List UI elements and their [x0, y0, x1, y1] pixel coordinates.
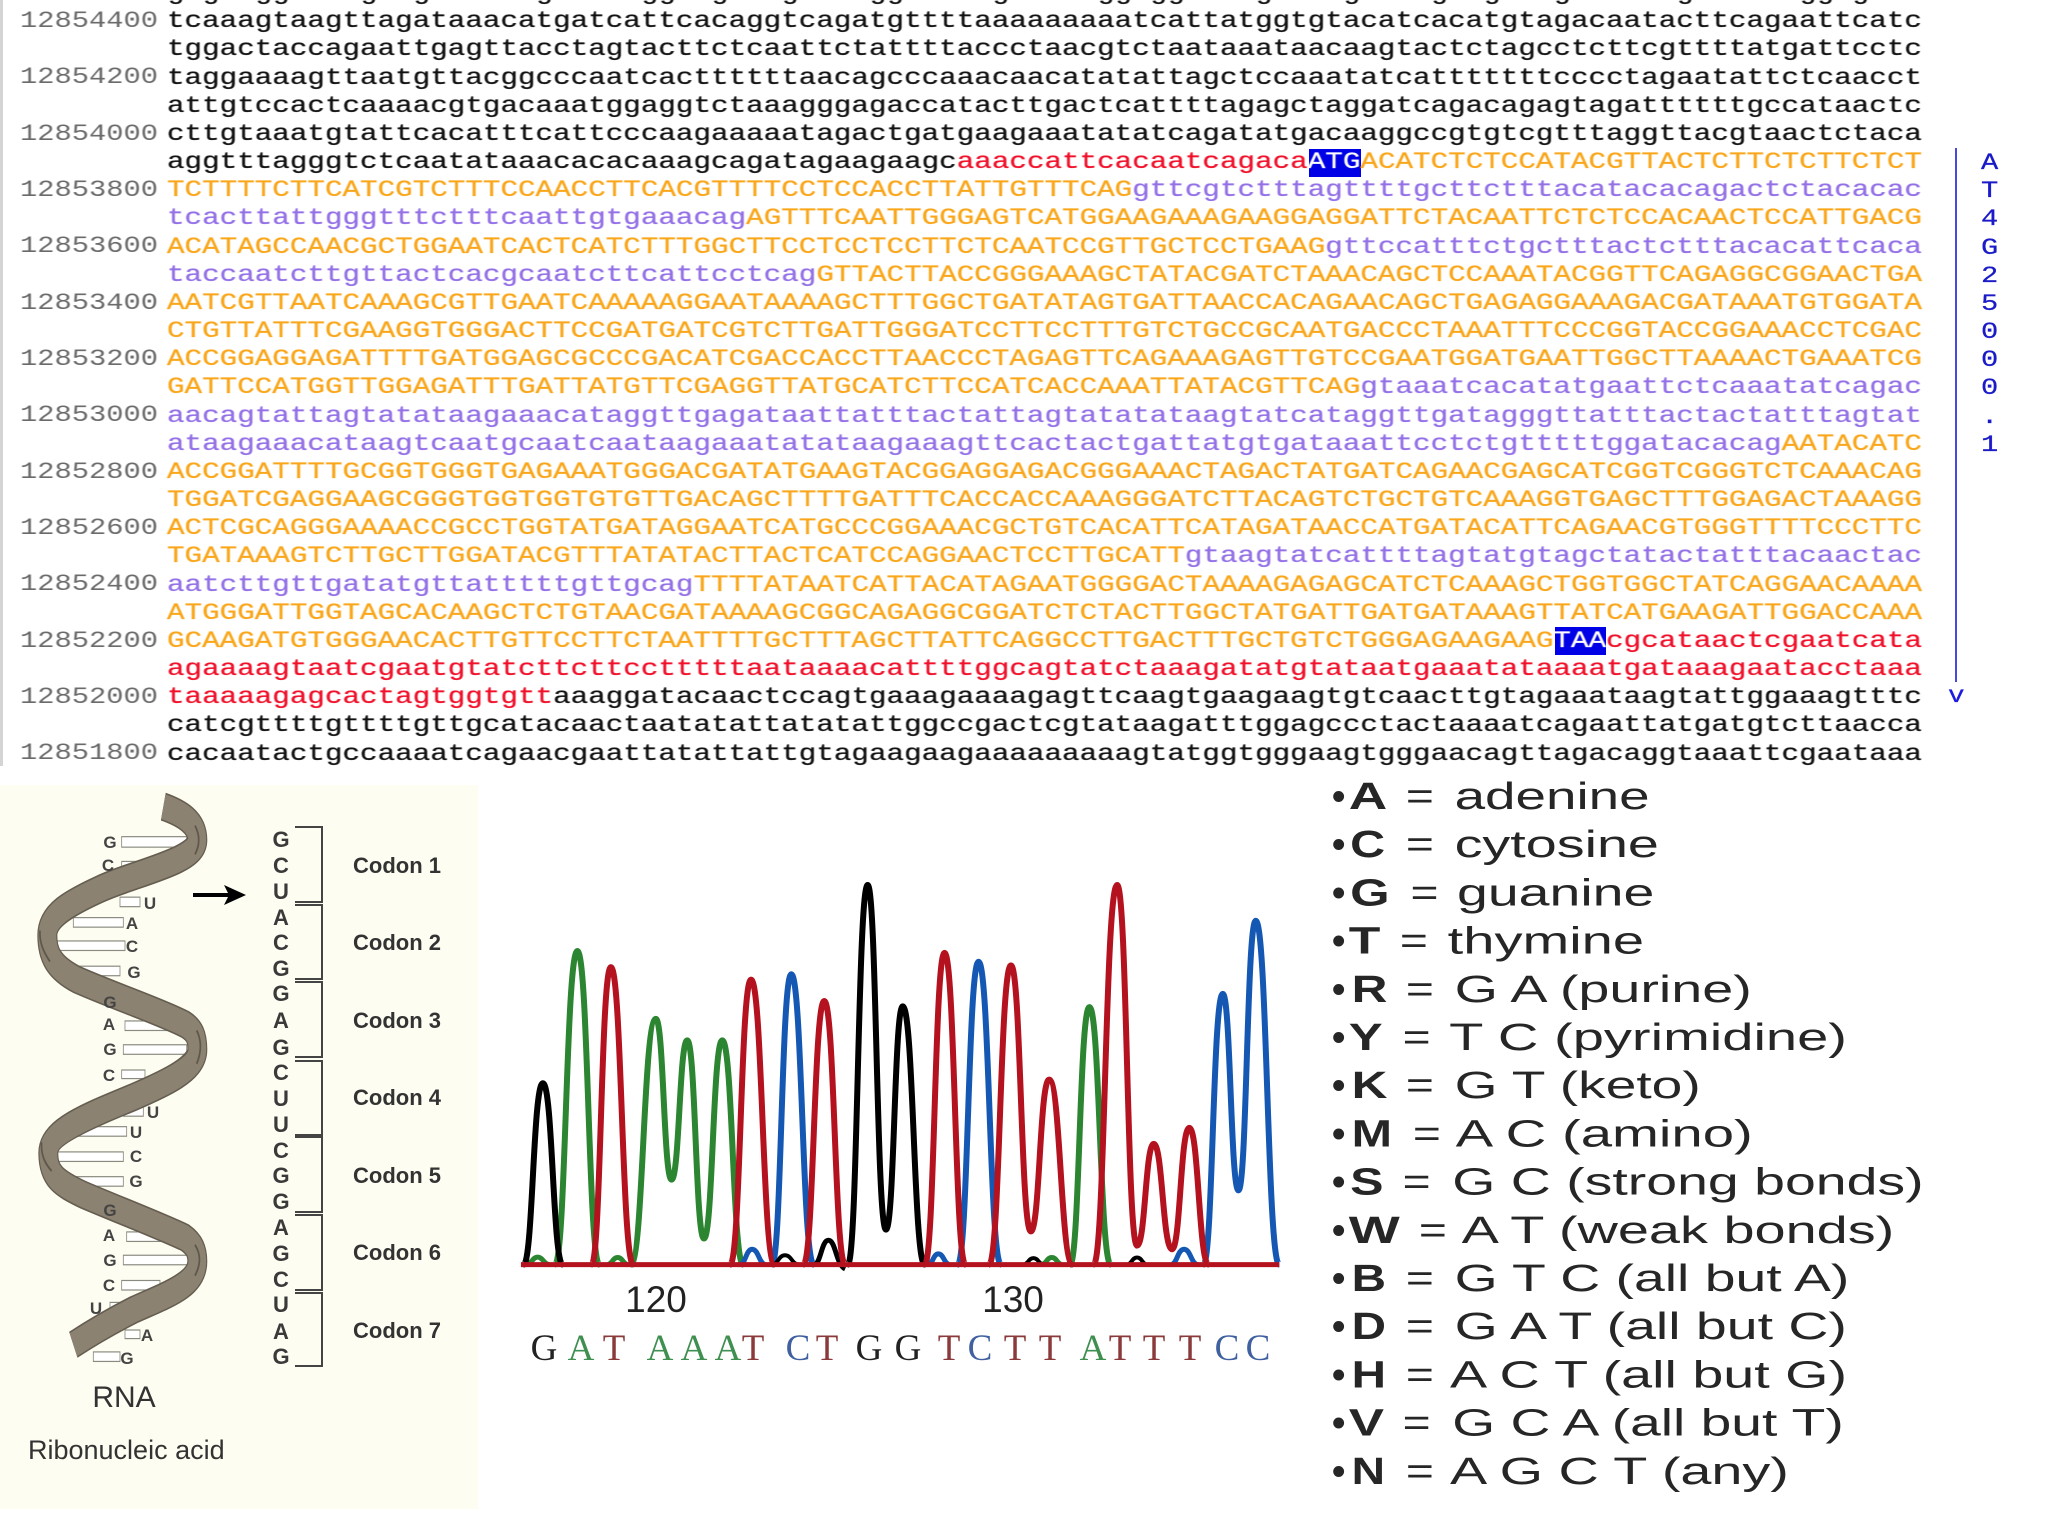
base calls: C [786, 1328, 810, 1369]
base calls: G [895, 1328, 921, 1369]
legend: nucleotide codes [1332, 779, 1924, 1493]
base calls: C [1246, 1328, 1270, 1369]
helix base letters: C [126, 937, 138, 956]
helix base letters: U [130, 1123, 142, 1142]
base calls: A [647, 1328, 674, 1369]
legend: nucleotide codes: C [1350, 824, 1385, 866]
legend: nucleotide codes: B [1352, 1258, 1386, 1300]
helix base letters: G [103, 1201, 117, 1220]
codon base column: G [272, 1189, 290, 1214]
helix base letters: U [90, 1299, 102, 1318]
codon base column: G [272, 956, 290, 981]
codon labels: Codon 7 [353, 1318, 441, 1343]
legend: nucleotide codes: • [1332, 1258, 1345, 1300]
codon base column [272, 827, 290, 1369]
legend: nucleotide codes: • [1332, 969, 1345, 1011]
chromatogram [520, 882, 1281, 1369]
helix base letters: A [103, 1015, 115, 1034]
legend: nucleotide codes: G T C (all but A) [1455, 1258, 1849, 1300]
legend: nucleotide codes: = [1406, 1065, 1434, 1107]
position labels: 130 [982, 1279, 1044, 1320]
base calls: T [1004, 1328, 1026, 1369]
codon base column: C [273, 853, 289, 878]
helix base letters: G [127, 963, 141, 982]
legend: nucleotide codes: = [1400, 921, 1428, 963]
codon labels [353, 853, 442, 1343]
codon base column: U [273, 1112, 289, 1137]
helix base letters: A [141, 1326, 153, 1345]
legend: nucleotide codes: W [1349, 1210, 1400, 1252]
codon base column: G [272, 1163, 290, 1188]
helix base letters: C [103, 1276, 115, 1295]
base calls: T [603, 1328, 625, 1369]
base calls: C [968, 1328, 992, 1369]
helix base letters: G [103, 1040, 117, 1059]
left gray page edge [0, 0, 3, 766]
base calls: A [715, 1328, 742, 1369]
legend: nucleotide codes: V [1349, 1403, 1385, 1445]
legend: nucleotide codes: • [1332, 1403, 1345, 1445]
legend: nucleotide codes: = [1406, 1306, 1434, 1348]
legend: nucleotide codes: T C (pyrimidine) [1449, 1017, 1847, 1059]
legend: nucleotide codes: = [1406, 1451, 1434, 1493]
coordinate numbers: 12854400 12854200 12854000 12853800 12853600 12853400 12853200 12853000 12852800 12852600 12852400 12852200 12852000 12851800 [20, 8, 158, 766]
base calls: A [681, 1328, 708, 1369]
legend: nucleotide codes: = [1406, 824, 1434, 866]
codon base column: U [273, 879, 289, 904]
legend: nucleotide codes: D [1352, 1306, 1386, 1348]
codon base column: G [272, 1344, 290, 1369]
codon base column: A [273, 905, 289, 930]
codon base column: A [273, 1319, 289, 1344]
codon base column: C [273, 1060, 289, 1085]
codon base column: A [273, 1215, 289, 1240]
legend: nucleotide codes: K [1352, 1065, 1388, 1107]
legend: nucleotide codes: = [1403, 1403, 1431, 1445]
legend: nucleotide codes: = [1413, 1113, 1441, 1155]
base calls: T [1109, 1328, 1131, 1369]
codon base column: U [273, 1292, 289, 1317]
legend: nucleotide codes: = [1406, 1258, 1434, 1300]
helix base letters: G [120, 1349, 134, 1368]
base calls: T [938, 1328, 960, 1369]
helix ribbon with base rungs [40, 807, 200, 1361]
legend: nucleotide codes: Y [1349, 1017, 1383, 1059]
base calls: A [1080, 1328, 1107, 1369]
codon base column: G [272, 1035, 290, 1060]
codon labels: Codon 4 [353, 1085, 442, 1110]
codon base column: U [273, 1086, 289, 1111]
helix base letters [90, 833, 159, 1368]
legend: nucleotide codes: • [1332, 824, 1345, 866]
base calls: T [816, 1328, 838, 1369]
legend: nucleotide codes: A G C T (any) [1450, 1451, 1789, 1493]
legend: nucleotide codes: G T (keto) [1455, 1065, 1701, 1107]
legend: nucleotide codes: • [1332, 1065, 1345, 1107]
helix base letters: U [147, 1103, 159, 1122]
legend: nucleotide codes: = [1419, 1210, 1447, 1252]
legend: nucleotide codes: G A T (all but C) [1455, 1306, 1847, 1348]
codon base column: G [272, 1241, 290, 1266]
helix base letters: G [103, 833, 117, 852]
legend: nucleotide codes: • [1332, 1162, 1345, 1204]
legend: nucleotide codes: thymine [1448, 921, 1644, 963]
base calls [531, 1328, 1270, 1369]
legend: nucleotide codes: • [1332, 1306, 1345, 1348]
position labels [625, 1279, 1044, 1320]
helix base letters: C [103, 1066, 115, 1085]
gene direction line [1955, 148, 1957, 682]
legend: nucleotide codes: • [1332, 1354, 1345, 1396]
legend: nucleotide codes: A C (amino) [1456, 1113, 1753, 1155]
legend: nucleotide codes: • [1332, 1113, 1345, 1155]
codon labels: Codon 2 [353, 930, 441, 955]
base calls: T [742, 1328, 764, 1369]
RNA title: RNA [92, 1381, 156, 1414]
base calls: T [1179, 1328, 1201, 1369]
codon base column: G [272, 827, 290, 852]
legend: nucleotide codes: G C (strong bonds) [1452, 1162, 1924, 1204]
codon brackets [295, 827, 322, 1366]
helix base letters: A [103, 1226, 115, 1245]
legend: nucleotide codes: N [1352, 1451, 1385, 1493]
legend: nucleotide codes: • [1332, 1451, 1345, 1493]
codon labels: Codon 5 [353, 1163, 441, 1188]
legend: nucleotide codes: = [1406, 969, 1434, 1011]
legend: nucleotide codes: A T (weak bonds) [1462, 1210, 1894, 1252]
base calls: A [568, 1328, 595, 1369]
stop codon highlight TAA [1555, 627, 1606, 655]
legend: nucleotide codes: cytosine [1455, 824, 1659, 866]
codon base column: A [273, 1008, 289, 1033]
helix base letters: G [129, 1172, 143, 1191]
base calls: T [1039, 1328, 1061, 1369]
position labels: 120 [625, 1279, 687, 1320]
legend: nucleotide codes: = [1410, 872, 1438, 914]
legend: nucleotide codes: • [1332, 1210, 1345, 1252]
legend: nucleotide codes: = [1403, 1017, 1431, 1059]
helix base letters: C [102, 856, 114, 875]
codon base column: C [273, 930, 289, 955]
legend: nucleotide codes: S [1350, 1162, 1384, 1204]
start codon highlight ATG [1309, 149, 1361, 177]
helix base letters: G [103, 993, 117, 1012]
legend: nucleotide codes: T [1349, 921, 1380, 963]
helix base letters: A [126, 914, 138, 933]
legend: nucleotide codes: G [1350, 872, 1390, 914]
legend: nucleotide codes: = [1406, 1354, 1434, 1396]
codon labels: Codon 3 [353, 1008, 441, 1033]
base calls: T [1143, 1328, 1165, 1369]
legend: nucleotide codes: • [1332, 921, 1345, 963]
codon base column: C [273, 1267, 289, 1292]
legend: nucleotide codes: guanine [1457, 872, 1654, 914]
legend: nucleotide codes: G C A (all but T) [1452, 1403, 1844, 1445]
legend: nucleotide codes: G A (purine) [1455, 969, 1752, 1011]
legend: nucleotide codes: = [1403, 1162, 1431, 1204]
codon labels: Codon 1 [353, 853, 441, 878]
codon base column: C [273, 1138, 289, 1163]
base calls: C [1215, 1328, 1239, 1369]
helix base letters: C [130, 1147, 142, 1166]
helix base letters: U [144, 894, 156, 913]
legend: nucleotide codes: H [1352, 1354, 1386, 1396]
genomic DNA sequence: gtgatggtccagatgaaaacagtttcaggatgaaagaattggtttcagaatcaggaggaaacgtttagtacagaagattgcaaatagtttaaaggtga tcaaagtaagttagataaacatgatcattcacaggtcagatgttttaaaaaaaaatcattatggtgtacatcacatgtagacaatacttcagaattcatc tggactaccagaattgagttacctagtacttctcaattctattttaccctaacgtctaataaataacaagtactctagcctcttcgttttatgattcctc taggaaaagttaatgttacggcccaatcacttttttaacagcccaaacaacatatattagctccaaatatcatttttttcccctagaatattctcaacct attgtccactcaaaacgtgacaaatggaggtctaaagggagaccatacttgactcattttagagctaggatcagacagagtagattttttgccataactc cttgtaaatgtattcacatttcattcccaagaaaaatagactgatgaagaaatatatcagatatgacaaggccgtgtcgtttaggttacgtaactctaca aggtttagggtctcaatataaacacacaaagcagatagaagaagcaaaccattcacaatcagacaATGACATCTCTCCATACGTTACTCTTCTCTTCTCT TCTTTTCTTCATCGTCTTTCCAACCTTCACGTTTTCCTCCACCTTATTGTTTCAGgttcgtctttagttttgcttctttacatacacagactctacacac tcacttattgggtttctttcaattgtgaaacagAGTTTCAATTGGGAGTCATGGAAGAAAGAAGGAGGATTCTACAATTCTCTCCACAACTCCATTGACG ACATAGCCAACGCTGGAATCACTCATCTTTGGCTTCCTCCTCCTTCTCAATCCGTTGCTCCTGAAGgttccatttctgctttactctttacacattcaca taccaatcttgttactcacgcaatcttcattcctcagGTTACTTACCGGGAAAGCTATACGATCTAAACAGCTCCAAATACGGTTCAGAGGCGGAACTGA AATCGTTAATCAAAGCGTTGAATCAAAAAGGAATAAAAGCTTTGGCTGATATAGTGATTAACCACAGAACAGCTGAGAGGAAAGACGATAAATGTGGATA CTGTTATTTCGAAGGTGGGACTTCCGATGATCGTCTTGATTGGGATCCTTCCTTTGTCTGCCGCAATGACCCTAAATTTCCCGGTACCGGAAACCTCGAC ACCGGAGGAGATTTTGATGGAGCGCCCGACATCGACCACCTTAACCCTAGAGTTCAGAAAGAGTTGTCCGAATGGATGAATTGGCTTAAAACTGAAATCG GATTCCATGGTTGGAGATTTGATTATGTTCGAGGTTATGCATCTTCCATCACCAAATTATACGTTCAGgtaaatcacatatgaattctcaaatatcagac aacagtattagtatataagaaacataggttgagataattatttactattagtatatataagtatcataggttgatagggttatttactactatttagtat ataagaaacataagtcaatgcaatcaataagaaatatataagaaagttcactactgattatgtgataaattcctctgtttttggatacacagAATACATC ACCGGATTTTGCGGTGGGTGAGAAATGGGACGATATGAAGTACGGAGGAGACGGGAAACTAGACTATGATCAGAACGAGCATCGGTCGGGTCTCAAACAG TGGATCGAGGAAGCGGGTGGTGGTGTGTTGACAGCTTTTGATTTCACCACCAAAGGGATCTTACAGTCTGCTGTCAAAGGTGAGCTTTGGAGACTAAAGG ACTCGCAGGGAAAACCGCCTGGTATGATAGGAATCATGCCCGGAAACGCTGTCACATTCATAGATAACCATGATACATTCAGAACGTGGGTTTTCCCTTC TGATAAAGTCTTGCTTGGATACGTTTATATACTTACTCATCCAGGAACTCCTTGCATTgtaagtatcattttagtatgtagctatactatttacaactac aatcttgttgatatgttatttttgttgcagTTTTATAATCATTACATAGAATGGGGACTAAAAGAGAGCATCTCAAAGCTGGTGGCTATCAGGAACAAAA ATGGGATTGGTAGCACAAGCTCTGTAACGATAAAAGCGGCAGAGGCGGATCTCTACTTGGCTATGATTGATGATAAAGTTATCATGAAGATTGGACCAAA GCAAGATGTGGGAACACTTGTTCCTTCTAATTTTGCTTTAGCTTATTCAGGCCTTGACTTTGCTGTCTGGGAGAAGAAGTAAcgcataactcgaatcata agaaaagtaatcgaatgtatcttcttcctttttaataaaacattttggcagtatctaaagatatgtataatgaaatataaaatgataaagaatacctaaa taaaaagagcactagtggtgttaaaggatacaactccagtgaaagaaaagagttcaagtgaagaagtgtcaacttgtagaaataagtattggaaagtttc catcgttttgttttgttgcatacaactaatatattatatattggccgactcgtataagatttggagccctactaaaatcagaattatgatgtcttaacca cacaatactgccaaaatcagaacgaattatattattgtagaagaagaaaaaaaaagtatggtgggaagtgggaacagttagacaggtaaattcgaataaa [167, 0, 1922, 767]
codon base column: G [272, 981, 290, 1006]
legend: nucleotide codes: A C T (all but G) [1450, 1354, 1847, 1396]
codon labels: Codon 6 [353, 1240, 441, 1265]
legend: nucleotide codes: M [1352, 1113, 1392, 1155]
panel: RNA helix and codons [0, 785, 478, 1509]
arrow to codon column [193, 885, 246, 905]
vertical gene name AT4G25000.1: A T 4 G 2 5 0 0 0 . 1 [1981, 150, 1998, 458]
legend: nucleotide codes: • [1332, 872, 1345, 914]
trace peaks [521, 885, 1279, 1269]
legend: nucleotide codes: R [1352, 969, 1387, 1011]
helix base letters: G [103, 1251, 117, 1270]
gene direction arrow tip: v [1948, 683, 1965, 709]
Ribonucleic acid caption: Ribonucleic acid [28, 1435, 225, 1465]
base calls: G [531, 1328, 557, 1369]
base calls: G [856, 1328, 882, 1369]
legend: nucleotide codes: • [1332, 1017, 1345, 1059]
